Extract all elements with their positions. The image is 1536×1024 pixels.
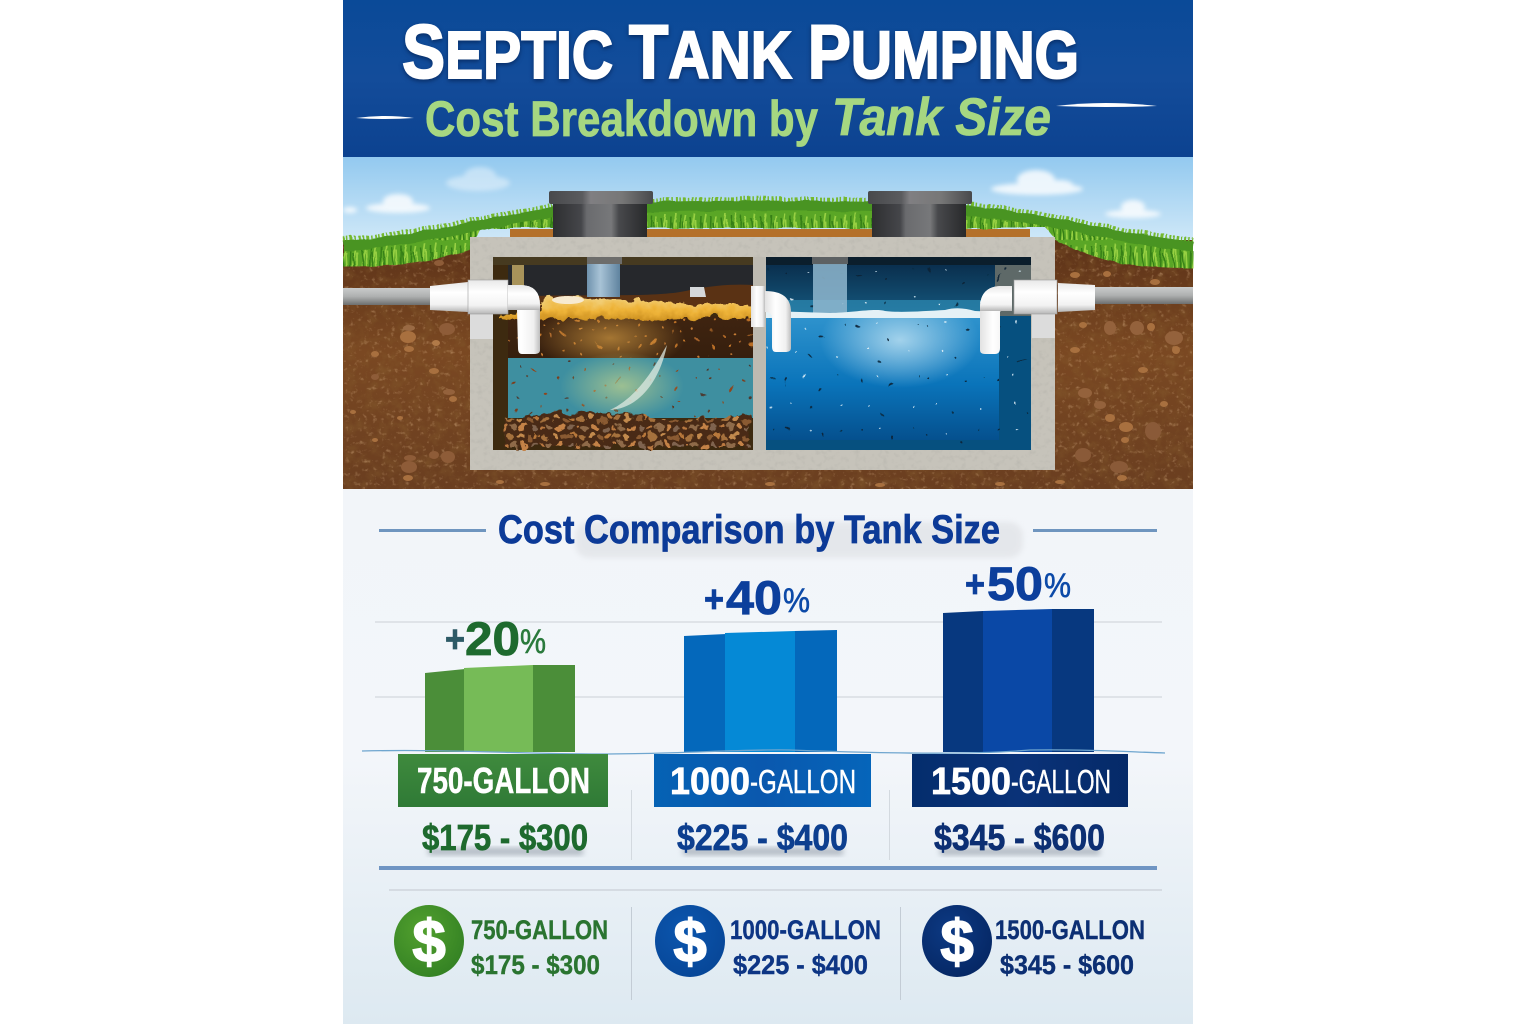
label: 750-gallon	[398, 754, 608, 807]
concrete tank	[470, 237, 1055, 470]
dirt strip on tank lid	[510, 229, 1030, 237]
heading: Cost Comparison by Tank Size	[498, 508, 1000, 552]
bar: 750-gallon	[425, 665, 575, 752]
percent: +20%: +	[445, 619, 465, 661]
summary: 750-gallon	[394, 905, 608, 980]
subtitle: Cost Breakdown by	[425, 91, 818, 147]
bar: 1500-gallon	[943, 609, 1094, 752]
baffle pipe right	[812, 257, 848, 314]
price: 1000-gallon: $225 - $400	[677, 817, 848, 858]
divider wall highlight	[753, 257, 766, 450]
percent: +50%: 50	[987, 557, 1043, 610]
scum layer	[500, 295, 753, 320]
percent: +40%	[704, 571, 810, 624]
icon: navy dollar coin: $	[940, 908, 974, 975]
settled crust	[533, 285, 753, 310]
price: 1500-gallon: $345 - $600	[934, 817, 1105, 858]
clouds	[343, 167, 1161, 218]
percent: +50%: +	[965, 564, 985, 606]
summary: 1500-gallon	[922, 905, 1145, 980]
small fitting	[690, 287, 706, 297]
label: 1000-gallon: 1000	[670, 761, 750, 803]
bar: 1000-gallon	[684, 630, 837, 752]
icon: navy dollar coin	[922, 905, 992, 977]
label: 1500-gallon: 1500	[931, 761, 1011, 803]
summary: 1000-gallon: $225 - $400	[733, 950, 868, 980]
icon: blue dollar coin	[655, 905, 725, 977]
water surface foam	[766, 308, 998, 318]
sky	[343, 157, 1193, 277]
icon: green dollar coin: $	[412, 908, 446, 975]
label: 1000-gallon: -GALLON	[750, 763, 856, 800]
icon: green dollar coin	[394, 905, 464, 977]
riser lid left	[549, 191, 653, 238]
percent: +20%: %	[520, 623, 546, 661]
header banner	[343, 0, 1193, 157]
price shadows	[428, 848, 1100, 855]
heading rules	[379, 529, 1157, 532]
middle transfer pipe	[751, 286, 791, 352]
percent: +40%: %	[783, 582, 810, 620]
percent: +40%: 40	[726, 571, 782, 624]
label: 1000-gallon	[654, 754, 871, 807]
percent: +50%	[965, 557, 1071, 610]
label: 1500-gallon: -GALLON	[1011, 763, 1111, 800]
percent: +40%: +	[704, 579, 724, 621]
baseline wave	[362, 750, 1165, 754]
right chamber	[766, 257, 1031, 450]
summary: 1500-gallon: 1500-GALLON	[995, 915, 1145, 945]
title: SEPTIC TANK PUMPING	[402, 10, 1079, 95]
inlet pipe	[343, 280, 540, 354]
percent: +20%: 20	[465, 612, 520, 665]
summary: 1000-gallon: 1000-GALLON	[730, 915, 881, 945]
riser lid right	[868, 191, 972, 238]
soil	[343, 240, 1193, 489]
summary: 750-gallon: 750-GALLON	[471, 915, 608, 945]
baffle pipe left	[587, 257, 622, 297]
icon: blue dollar coin: $	[673, 908, 707, 975]
summary: 1500-gallon: $345 - $600	[1000, 950, 1134, 980]
illustration: septic tank cross-section	[343, 157, 1193, 489]
percent: +20%	[445, 612, 546, 665]
heading ribbon	[575, 522, 1023, 558]
left chamber	[493, 257, 753, 450]
percent: +50%: %	[1044, 567, 1071, 605]
label: 750-gallon: 750-GALLON	[417, 760, 590, 801]
grass mound	[343, 201, 1193, 268]
summary: 750-gallon: $175 - $300	[471, 950, 600, 980]
pebbles	[350, 260, 1183, 487]
cost comparison panel	[343, 489, 1193, 1024]
outlet pipe	[980, 280, 1193, 354]
summary: 1000-gallon	[655, 905, 881, 980]
label: 1500-gallon	[912, 754, 1128, 807]
price: 750-gallon: $175 - $300	[422, 817, 588, 858]
subtitle swooshes	[356, 103, 1157, 119]
subtitle: Tank Size	[832, 88, 1051, 147]
